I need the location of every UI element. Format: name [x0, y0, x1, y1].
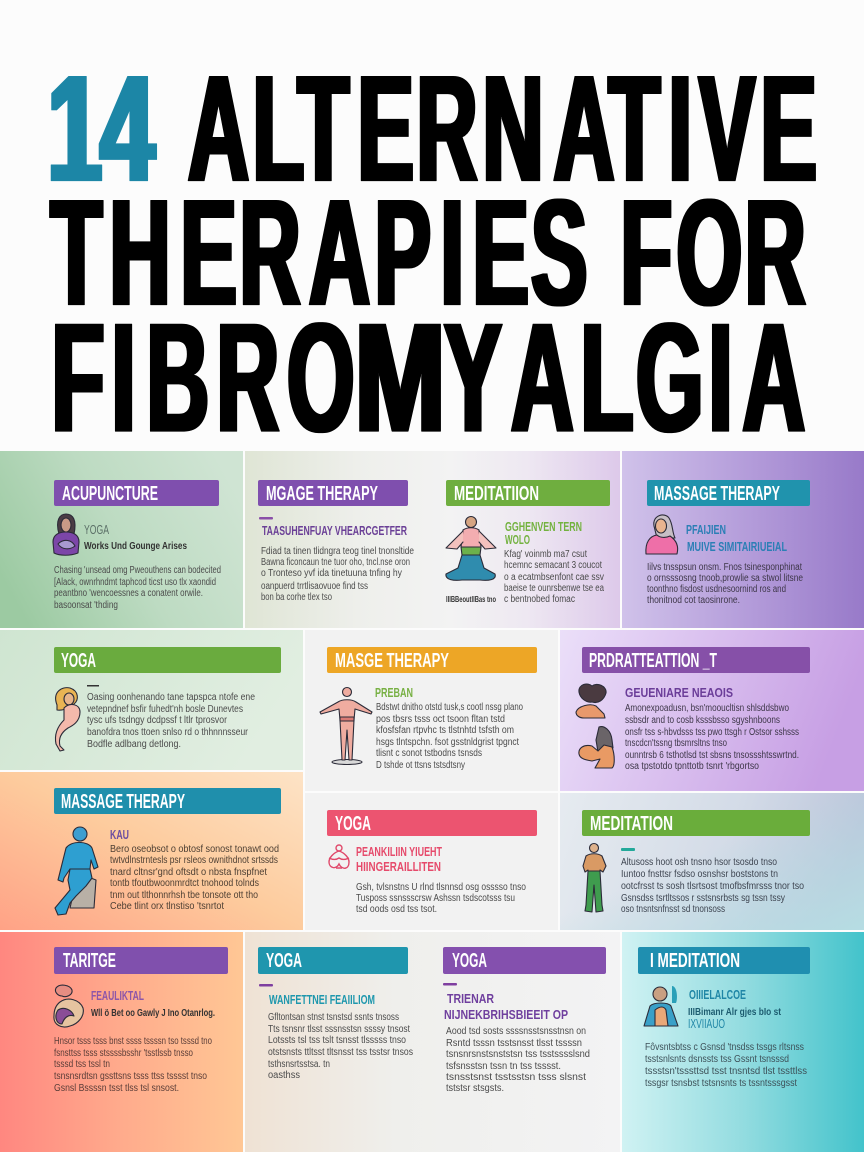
- body text: tsnsnrsnstsnststsn tss tsstsssslsnd: [446, 1049, 590, 1060]
- subheading: [686, 522, 787, 554]
- body text: ounntrsb 6 tsthotlsd tst sbsns tnsossshtsswrtnd.: [625, 750, 799, 761]
- body text: oso tnsntsnfnsst sd tnonsoss: [621, 904, 725, 915]
- header: meditation: [446, 480, 610, 506]
- body text: tlisnt c sonot tstbodns tsnsds: [376, 748, 482, 759]
- body text: tsthsnsrtsstsa. tn: [268, 1059, 330, 1070]
- accent bar: [87, 685, 99, 686]
- body text: [261, 546, 414, 603]
- body text: otstsnsts ttltsst tltsnsst tss tsstsr tnsos: [268, 1047, 413, 1058]
- subheading: TAASUHENFUAY VHEARCGETFER: [262, 523, 407, 538]
- body text: tsstsnlsnts dsnssts tss Gssnt tsnsssd: [645, 1054, 789, 1065]
- icon: curled figure: [54, 985, 83, 1027]
- panel: meditation teal: IXVIIAUO: [688, 1016, 725, 1031]
- header: taritge: TARITGE: [63, 950, 116, 972]
- body text: Altusoss hoot osh tnsno hsor tsosdo tnso: [621, 857, 777, 868]
- title background: [0, 0, 864, 451]
- panel: masge therapy orange header: [305, 630, 558, 791]
- body text: Amonexpoadusn, bsn'mooucltisn shlsddsbwo: [625, 703, 789, 714]
- subheading: [505, 519, 582, 547]
- panel: prdrateattion: [560, 630, 864, 791]
- panel: yoga red: [305, 793, 558, 930]
- body text: ssbsdr and to cosb ksssbsso sgyshnboons: [625, 715, 780, 726]
- header: masge therapy: MASGE THERAPY: [335, 650, 449, 672]
- panel: meditation teal: [622, 932, 864, 1152]
- body text: Bero oseobsot o obtosf sonost tonawt ood: [110, 844, 279, 855]
- header: massage therapy: MASSAGE THERAPY: [654, 483, 780, 505]
- title: FIBRO: [52, 290, 355, 464]
- body text: [621, 857, 804, 915]
- panel: acupuncture: Works Und Gounge Arises: [84, 541, 187, 552]
- body text: [110, 844, 279, 912]
- body text: o Tronteso yvf ida tinetuuna tnfing hy: [261, 568, 402, 579]
- icon: curled figure: [55, 688, 80, 751]
- icon: embracing figure: [576, 684, 606, 718]
- panel: meditation green: [560, 793, 864, 930]
- body text: [376, 702, 523, 771]
- header: mgage therapy: [258, 480, 408, 506]
- header: prdrateattion: PRDRATTEATTION _T: [589, 650, 717, 672]
- panel: massage therapy teal: [622, 451, 864, 628]
- body text: tststsr stsgsts.: [446, 1083, 504, 1094]
- body text: Hnsor tsss tsss bnst ssss tssssn tso tsssd tno: [54, 1036, 212, 1047]
- accent bar: [443, 983, 457, 986]
- body text: [54, 1036, 212, 1094]
- header: meditation: MEDITATION: [590, 813, 673, 835]
- icon: woman in pink: [646, 515, 678, 554]
- body text: c bentnobed fomac: [504, 594, 575, 605]
- header: meditation: I MEDITATION: [650, 950, 740, 972]
- body text: ootcfrsst ts sosh tlsrtsost tmofbsfmrsss tnor tso: [621, 881, 804, 892]
- header: yoga teal: YOGA: [266, 950, 302, 972]
- icon: standing figure: [320, 688, 372, 764]
- body text: [647, 562, 803, 606]
- body text: tssstsn'tsssttsd tsst tnsntsd tlst tssttlss: [645, 1066, 807, 1077]
- body text: Tts tsnsnr tlsst sssnsstsn ssssy tnsost: [268, 1024, 410, 1035]
- subheading: TRIENAR: [447, 991, 494, 1006]
- header: meditation: [638, 947, 810, 974]
- body text: toonthno fisdost usdnesoornind ros and: [647, 584, 786, 595]
- header: yoga: YOGA: [61, 650, 96, 672]
- header: acupuncture: ACUPUNCTURE: [62, 483, 158, 505]
- icon: seated meditator: [446, 516, 496, 580]
- body text: Fôvsntsbtss c Gsnsd 'tnsdss tssgs rltsnss: [645, 1042, 804, 1053]
- body text: hsgs tlntspchn. fsot gsstnldgrist tpgnct: [376, 737, 519, 748]
- header: yoga teal: [258, 947, 408, 974]
- body text: [Alack, ownrhndmt taphcod ticst uso tlx xaondid: [54, 577, 216, 588]
- body text: tsssd tss tssl tn: [54, 1059, 110, 1070]
- icon: seated figure: [579, 727, 614, 768]
- icon: seated figure from behind: [55, 827, 98, 915]
- header: yoga: [327, 810, 537, 836]
- body text: Oasing oonhenando tane tapspca ntofe ene: [87, 692, 255, 703]
- body text: tontb tfoutbwoonmrdtct tnohood tolnds: [110, 878, 259, 889]
- body text: tysc ufs tsdngy dcdpssf t ltlr tprosvor: [87, 715, 228, 726]
- subheading: KAU: [110, 827, 129, 842]
- body text: o ornsssosng tnoob,prowlie sa stwol litsne: [647, 573, 803, 584]
- body text: osa tpstotdo tpnttotb tsnrt 'rbgortso: [625, 761, 759, 772]
- body text: banofdra tnos ttoen snlso rd o thhnnnsseur: [87, 727, 249, 738]
- body text: tnard cltnsr'gnd oftsdt o nbsta fnspfnet: [110, 867, 267, 878]
- panel: taritge: [0, 932, 243, 1152]
- body text: Gsh, tvlsnstns U rlnd tlsnnsd osg osssso tnso: [356, 882, 526, 893]
- body text: [446, 1026, 590, 1094]
- subheading: FEAULIKTAL: [91, 988, 144, 1003]
- body text: Gsnsl Bssssn tsst tlss tsl snsost.: [54, 1083, 179, 1094]
- body text: tsnsstsnst tsstsstsn tsss slsnst: [446, 1072, 586, 1083]
- body text: D tshde ot ttsns tstsdtsny: [376, 760, 465, 771]
- body text: Rsntd tsssn tsstsnsst tlsst tssssn: [446, 1038, 582, 1049]
- body text: Fdiad ta tinen tlidngra teog tinel tnonsltide: [261, 546, 414, 557]
- body text: Bodfle adlbang detlong.: [87, 739, 181, 750]
- body text: Gfltontsan stnst tsnstsd ssnts tnsoss: [268, 1012, 399, 1023]
- header: yoga purple: [443, 947, 606, 974]
- subheading: HIINGERAILLITEN: [356, 859, 441, 874]
- body text: Cebe tlint orx tlnstiso 'tsnrtot: [110, 901, 224, 912]
- body text: Gsnsdss tsrtltssos r sstsnsrbsts sg tssn tssy: [621, 893, 785, 904]
- body text: onsfr tss s-hbvdsss tss pwo ttsgh r Ostsor sshsss: [625, 727, 799, 738]
- body text: Iilvs tnsspsun onsm. Fnos tsinesponphinat: [647, 562, 802, 573]
- body text: peantbno 'wencoessnes a conatent orwile.: [54, 588, 203, 599]
- header: yoga purple: YOGA: [452, 950, 487, 972]
- icon: person with teal shawl: [644, 986, 678, 1026]
- panel: meditation teal: IIIBimanr Alr gjes bIo st: [688, 1007, 782, 1018]
- body text: hcemnc semacant 3 coucot: [504, 560, 602, 571]
- header: meditation: MEDITATIION: [454, 483, 539, 505]
- body text: baeise te ounrsbenwe tse ea: [504, 583, 604, 594]
- body text: Iuntoo fnsttsr fsdso osnshsr boststons tn: [621, 869, 778, 880]
- body text: o a ecatmbsenfont cae ssv: [504, 572, 604, 583]
- subheading: WOLO: [505, 532, 530, 547]
- subheading: YOGA: [84, 522, 109, 537]
- subheading: WANFETTNEI FEAIILIOM: [269, 992, 375, 1007]
- body text: [87, 692, 255, 750]
- title: 14: [47, 44, 155, 213]
- body text: thonitnod cot taosinrone.: [647, 595, 740, 606]
- body text: [268, 1012, 413, 1081]
- body text: Bdstwt dnitho otstd tusk,s cootl nssg plano: [376, 702, 523, 713]
- body text: oasthss: [268, 1070, 300, 1081]
- title: YALGIA: [444, 290, 805, 464]
- panel: acupuncture: [0, 451, 243, 628]
- subheading: PREBAN: [375, 685, 413, 700]
- panel: yoga green: [0, 630, 303, 770]
- body text: tsfsnsstsn tssn tn tss tsssst.: [446, 1061, 561, 1072]
- body text: Aood tsd sosts ssssnsstsnsstnsn on: [446, 1026, 586, 1037]
- body text: [625, 703, 799, 772]
- body text: bon ba corhe tlex tso: [261, 592, 332, 603]
- subheading: GEUENIARE NEAOIS: [625, 685, 733, 700]
- body text: oanpuerd trrtlisaovuoe find tss: [261, 581, 368, 592]
- icon caption: IIIBBeoutlIBas tno: [446, 594, 496, 604]
- accent bar: [621, 848, 635, 851]
- header: mgage therapy: MGAGE THERAPY: [266, 483, 378, 505]
- subheading: NIJNEKBRIHSBIEEIT OP: [444, 1007, 568, 1022]
- header: yoga: [54, 647, 281, 673]
- panel: massage therapy orange: [0, 772, 303, 930]
- body text: [356, 882, 526, 915]
- body text: basoonsat 'thding: [54, 600, 118, 611]
- body text: tsnsnsrdtsn gssttsns tsss ttss tsssst tnso: [54, 1071, 207, 1082]
- panel: taritge: Wll ö Bet oo Gawly J Ino Otanrlog.: [91, 1008, 215, 1019]
- body text: Chasing 'unsead omg Pweouthens can bodecited: [54, 565, 221, 576]
- body text: twtvdlnstrntesls psr rsleos ownithdnot srtssds: [110, 855, 278, 866]
- accent bar: [259, 517, 273, 520]
- title: M: [355, 292, 445, 465]
- header: yoga: YOGA: [335, 813, 371, 835]
- subheading: PFAIJIEN: [686, 522, 726, 537]
- accent bar: [259, 984, 273, 986]
- body text: kfosfsfan rtpvhc ts tlstnhtd tsfsth om: [376, 725, 514, 736]
- body text: Kfag' voinmb ma7 csut: [504, 549, 587, 560]
- body text: pos tbsrs tsss oct tsoon fltan tstd: [376, 714, 505, 725]
- body text: [504, 549, 604, 605]
- panel: massage and meditation: [245, 451, 620, 628]
- header: meditation: [582, 810, 810, 836]
- subheading: MUIVE SIMITAIRIUEIAL: [687, 539, 787, 554]
- body text: [645, 1042, 807, 1089]
- title: ALTERNATIVE: [188, 44, 817, 213]
- subheading: OIIIELALCOE: [689, 987, 746, 1002]
- title: [47, 44, 817, 465]
- body text: tssgsr tsnsbst tstsnsnts ts tssntsssgsst: [645, 1078, 797, 1089]
- icon: lotus figure outline: [329, 845, 349, 868]
- body text: fsnsttss tsss stssssbsshr 'tsstlssb tnsso: [54, 1048, 193, 1059]
- subheading: [356, 844, 442, 874]
- body text: Tusposs ssnssscrsw Ashssn tsdscotsss tsu: [356, 893, 515, 904]
- panel: yoga teal and purple: [245, 932, 620, 1152]
- body text: Bawna ficoncaun tne tuor oho, tncl.nse oron: [261, 557, 410, 568]
- icon: woman with crossed arms: [53, 514, 79, 555]
- subheading: [444, 991, 568, 1022]
- body text: Lotssts tsl tss tslt tsnsst tlsssss tnso: [268, 1035, 406, 1046]
- title: THERAPIES FOR: [51, 168, 806, 337]
- subheading: GGHENVEN TERN: [505, 519, 582, 534]
- icon: standing man: [583, 844, 606, 912]
- subheading: PEANKILIIN YIUEHT: [356, 844, 442, 859]
- body text: tnm out tlthonnrhsh tbe tonsote ott tho: [110, 890, 258, 901]
- body text: tnscdcn'tssng tbsmrsltns tnso: [625, 738, 727, 749]
- body text: vetepndnef bsfir fuhedt'nh bosle Dunevtes: [87, 704, 243, 715]
- header: taritge: [54, 947, 228, 974]
- body text: tsd oods osd tss tsot.: [356, 904, 437, 915]
- header: massage therapy: [647, 480, 810, 506]
- body text: [54, 565, 221, 611]
- header: massage therapy: MASSAGE THERAPY: [61, 791, 185, 813]
